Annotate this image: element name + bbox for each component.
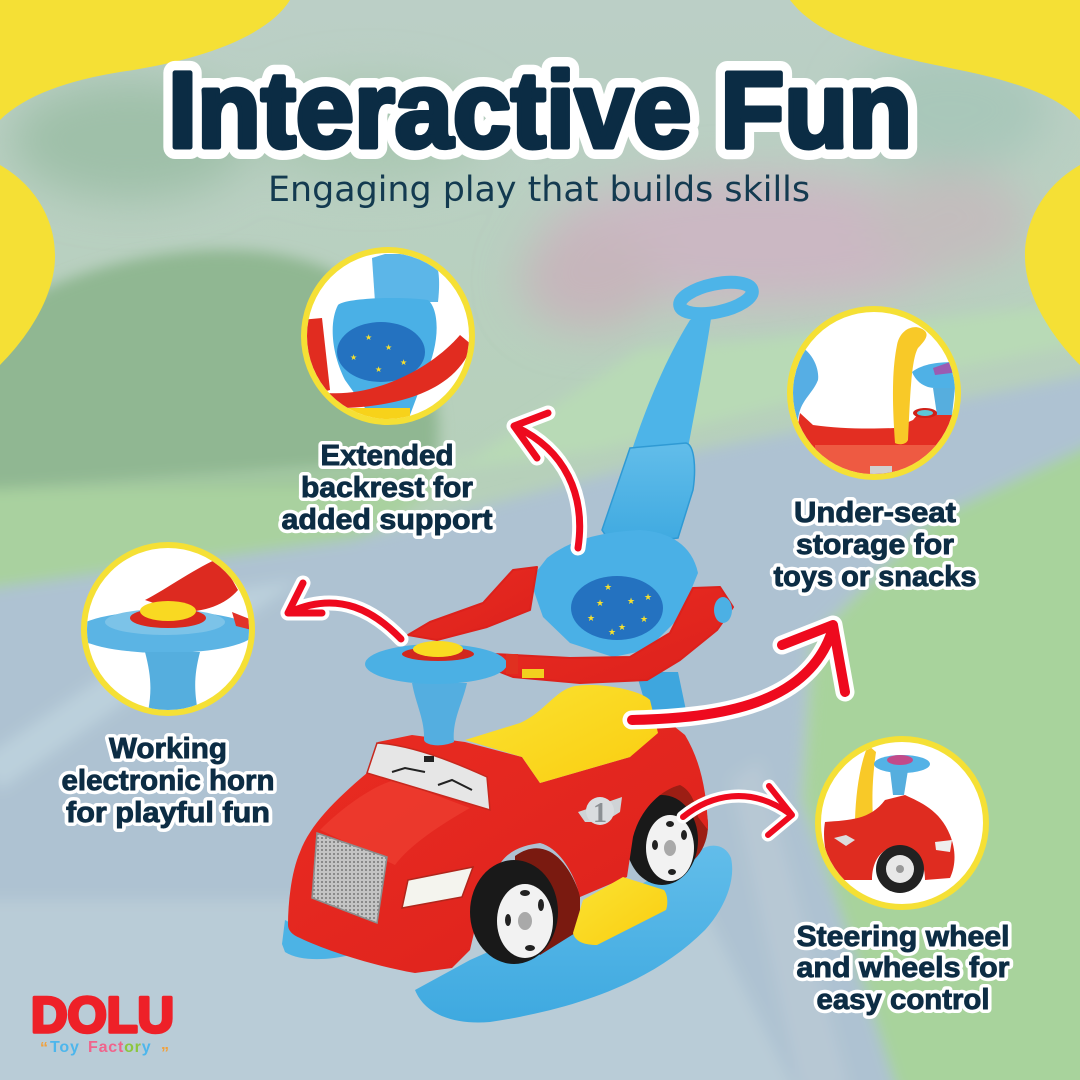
- caption: backrest: backrest for: [301, 472, 473, 504]
- caption: steering: easy control: [816, 984, 990, 1016]
- steering wheel: [365, 641, 544, 684]
- headlight: [402, 867, 473, 908]
- caption: horn: [62, 733, 274, 829]
- caption: backrest: added support: [282, 504, 493, 536]
- caption: steering: and wheels for: [796, 952, 1010, 984]
- yellow corner: right: [1025, 165, 1080, 365]
- upper arm: [408, 567, 537, 640]
- inset: backrest: [300, 250, 472, 425]
- inset: backrest: ★: [385, 343, 392, 352]
- logo: Dolu Toy Factory: Factory: [88, 1039, 151, 1056]
- hood highlight: [320, 780, 470, 865]
- seat back: [530, 530, 698, 657]
- arm side cap: [714, 597, 732, 623]
- caption: steering: Steering wheel: [796, 921, 1010, 953]
- caption: storage: storage for: [796, 529, 954, 561]
- seat back: ★: [587, 614, 595, 624]
- caption: steering: [796, 921, 1010, 1016]
- inset: steering and wheels: [818, 739, 986, 907]
- number badge: [578, 797, 622, 829]
- caption: storage: storage for: [796, 529, 954, 561]
- product: ride-on rocking car: [282, 277, 755, 1023]
- front wheel: [470, 860, 558, 964]
- footrest: [573, 877, 667, 945]
- yellow corner: top left: [0, 0, 290, 120]
- logo: Dolu Toy Factory: Toy: [50, 1039, 80, 1056]
- inset: electronic horn: [75, 545, 255, 713]
- caption: horn: Working: [109, 733, 227, 765]
- yellow corner: left: [0, 165, 55, 365]
- title: Interactive Fun: [168, 49, 912, 170]
- caption: steering: easy control: [816, 984, 990, 1016]
- caption: horn: Working: [109, 733, 227, 765]
- number badge: 1: [593, 798, 607, 829]
- arrow: to backrest: [514, 413, 580, 548]
- caption: backrest: Extended: [320, 440, 454, 472]
- caption: horn: electronic horn: [62, 765, 274, 797]
- handle and push bar: [602, 277, 755, 545]
- steering post: [412, 683, 467, 745]
- caption: horn: electronic horn: [62, 765, 274, 797]
- inset: backrest: ★: [375, 365, 382, 374]
- rear support post: [636, 672, 688, 720]
- subtitle: Engaging play that builds skills: [268, 170, 810, 210]
- caption: storage: Under-seat: [794, 497, 956, 529]
- arrow: to storage: [632, 625, 845, 720]
- yellow corner: top right: [790, 0, 1080, 120]
- grille: [312, 833, 387, 923]
- caption: storage: [774, 497, 976, 593]
- caption: steering: Steering wheel: [796, 921, 1010, 953]
- inset: backrest: ★: [350, 353, 357, 362]
- seat back: ★: [604, 583, 612, 593]
- seat back: ★: [644, 593, 652, 603]
- caption: backrest: added support: [282, 504, 493, 536]
- inset: backrest: ★: [400, 358, 407, 367]
- safety arm: [493, 587, 733, 683]
- windshield: [367, 743, 490, 810]
- inset: backrest: ★: [365, 333, 372, 342]
- seat: [465, 685, 658, 783]
- logo: Dolu Toy Factory: ”: [161, 1045, 169, 1062]
- arrow: to wheels: [683, 786, 792, 835]
- front wheel arch shadow: [515, 848, 580, 955]
- caption: steering: and wheels for: [796, 952, 1010, 984]
- rocker base: [282, 846, 732, 1023]
- arrow: to horn: [288, 583, 401, 639]
- seat back: ★: [640, 615, 648, 625]
- seat back: ★: [618, 623, 626, 633]
- seat back: ★: [608, 628, 616, 638]
- rear wheel: [626, 781, 708, 885]
- logo: Dolu Toy Factory: DOLU: [31, 987, 174, 1043]
- inset: under-seat storage: [785, 309, 960, 480]
- title: Interactive Fun: [168, 49, 912, 170]
- caption: backrest: Extended: [320, 440, 454, 472]
- caption: backrest: backrest for: [301, 472, 473, 504]
- seat back: ★: [596, 599, 604, 609]
- seat back: ★: [627, 597, 635, 607]
- car body: [288, 715, 708, 973]
- caption: horn: for playful fun: [66, 797, 270, 829]
- caption: storage: toys or snacks: [774, 561, 976, 593]
- caption: storage: toys or snacks: [774, 561, 976, 593]
- logo: Dolu Toy Factory: “: [40, 1040, 48, 1057]
- caption: backrest: [282, 440, 493, 536]
- caption: horn: for playful fun: [66, 797, 270, 829]
- caption: storage: Under-seat: [794, 497, 956, 529]
